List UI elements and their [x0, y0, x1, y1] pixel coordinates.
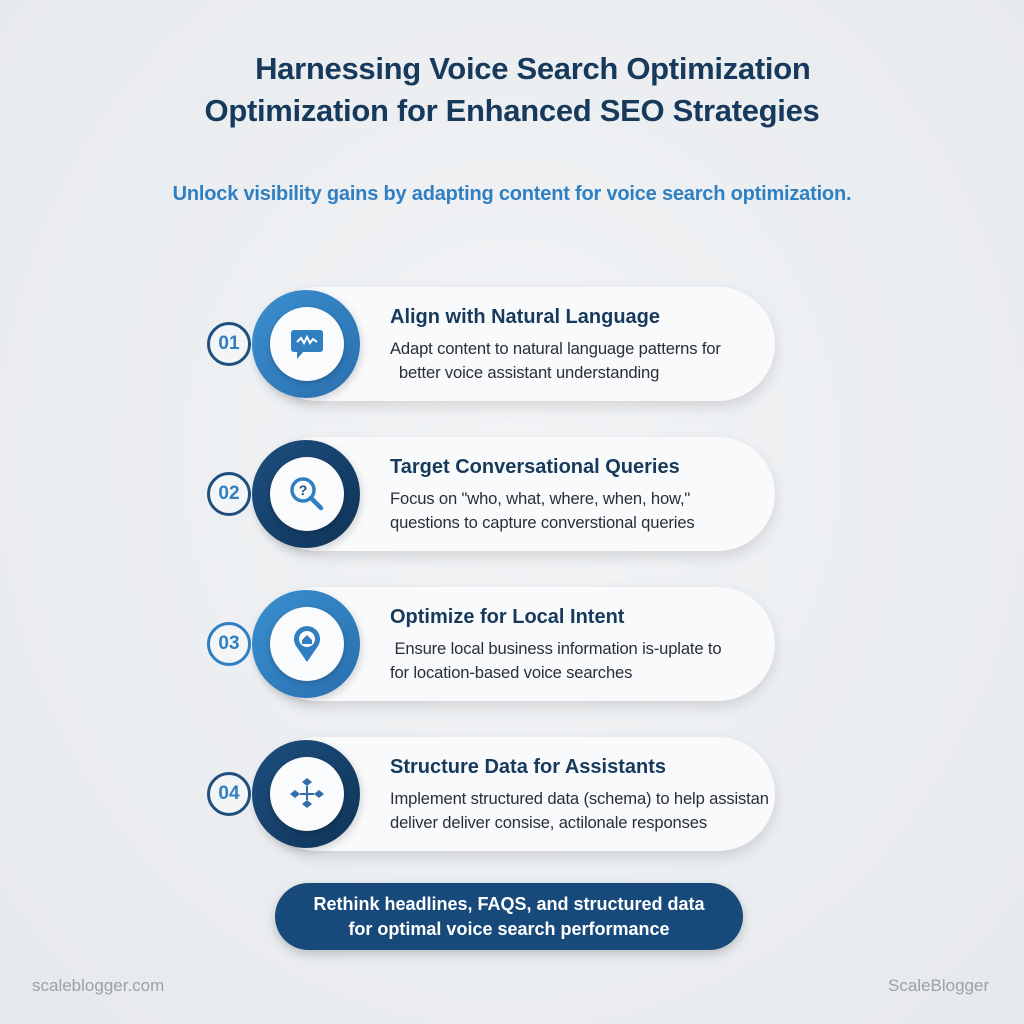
panel: step 3: [207, 587, 778, 711]
footer right: ScaleBlogger: [888, 976, 989, 995]
heading: Structure Data for Assistants: [390, 756, 666, 778]
text: [390, 489, 695, 532]
icon: magnifier question: [290, 477, 324, 510]
heading: Optimize for Local Intent: [390, 606, 624, 628]
number 04: [207, 772, 251, 816]
text: [390, 789, 769, 832]
text: questions to capture converstional queries: [390, 513, 695, 532]
icon: chat bubble: [291, 330, 323, 359]
panel: step 2: [207, 437, 778, 561]
panel: step 4: [207, 737, 778, 861]
callout button: for optimal voice search performance: [348, 919, 670, 939]
number 02: [207, 472, 251, 516]
text: [390, 339, 721, 382]
number 01: [207, 322, 251, 366]
number 01: 01: [218, 333, 240, 354]
title: [204, 51, 820, 128]
subtitle: Unlock visibility gains by adapting content for voice search optimization.: [173, 183, 851, 205]
text: [390, 639, 721, 682]
heading: Align with Natural Language: [390, 306, 660, 328]
icon: structured data: [290, 778, 324, 808]
callout button: [275, 883, 743, 950]
text: Implement structured data (schema) to help assistan: [390, 789, 769, 808]
title: Optimization for Enhanced SEO Strategies: [204, 93, 820, 128]
callout button: Rethink headlines, FAQS, and structured data: [313, 894, 705, 914]
number 02: 02: [218, 483, 240, 504]
heading: Target Conversational Queries: [390, 456, 680, 478]
text: Adapt content to natural language patterns for: [390, 339, 721, 358]
title: Harnessing Voice Search Optimization: [255, 51, 810, 86]
number 04: 04: [218, 783, 240, 804]
text: Focus on "who, what, where, when, how,": [390, 489, 690, 508]
text: for location-based voice searches: [390, 663, 632, 682]
panel: step 1: [207, 287, 778, 411]
text: better voice assistant understanding: [399, 363, 659, 382]
text: deliver deliver consise, actilonale responses: [390, 813, 707, 832]
number 03: 03: [218, 633, 240, 654]
icon: magnifier question: ?: [299, 482, 307, 498]
footer left: scaleblogger.com: [32, 976, 164, 995]
number 03: [207, 622, 251, 666]
text: Ensure local business information is-uplate to: [394, 639, 721, 658]
icon: location pin: [294, 626, 320, 662]
